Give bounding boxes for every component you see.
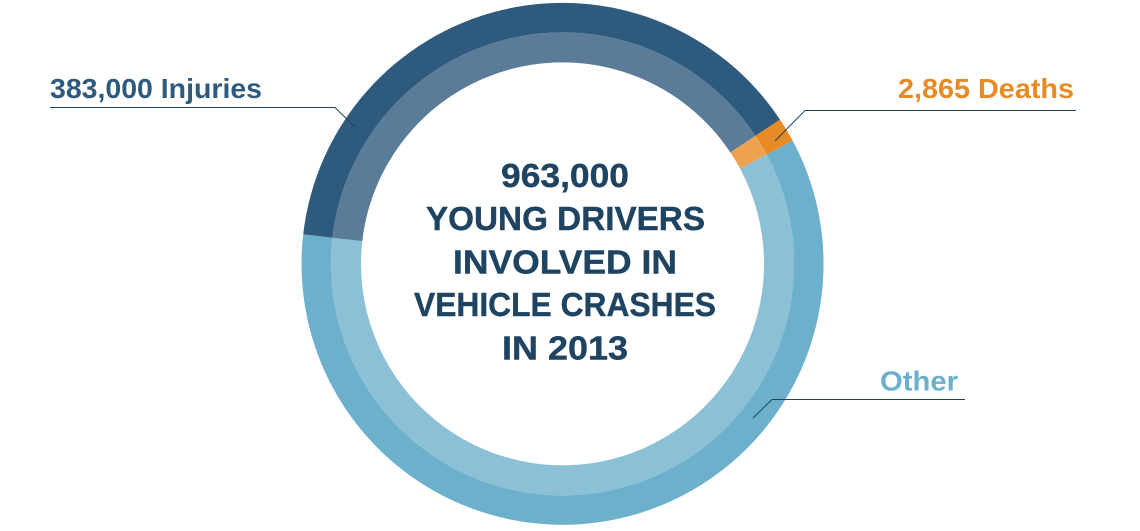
donut chart — [302, 3, 824, 525]
segment: other — [302, 140, 824, 525]
center heading: IN 2013 — [502, 330, 628, 366]
leader line: deaths — [775, 110, 1076, 141]
label: other — [753, 366, 965, 418]
leader line: injuries — [50, 108, 355, 127]
label: injuries — [50, 73, 355, 127]
label: deaths: 2,865 Deaths — [898, 73, 1074, 104]
center heading: YOUNG DRIVERS — [426, 200, 705, 237]
center heading: INVOLVED IN — [453, 244, 677, 280]
label: injuries: 383,000 Injuries — [50, 73, 262, 104]
segment: injuries — [303, 3, 780, 241]
segment: deaths — [730, 120, 793, 169]
center heading: VEHICLE CRASHES — [414, 286, 716, 323]
center heading — [414, 157, 716, 366]
center heading: 963,000 — [501, 157, 629, 194]
leader line: other — [753, 400, 965, 418]
label: other: Other — [880, 366, 958, 396]
label: deaths — [775, 73, 1076, 141]
